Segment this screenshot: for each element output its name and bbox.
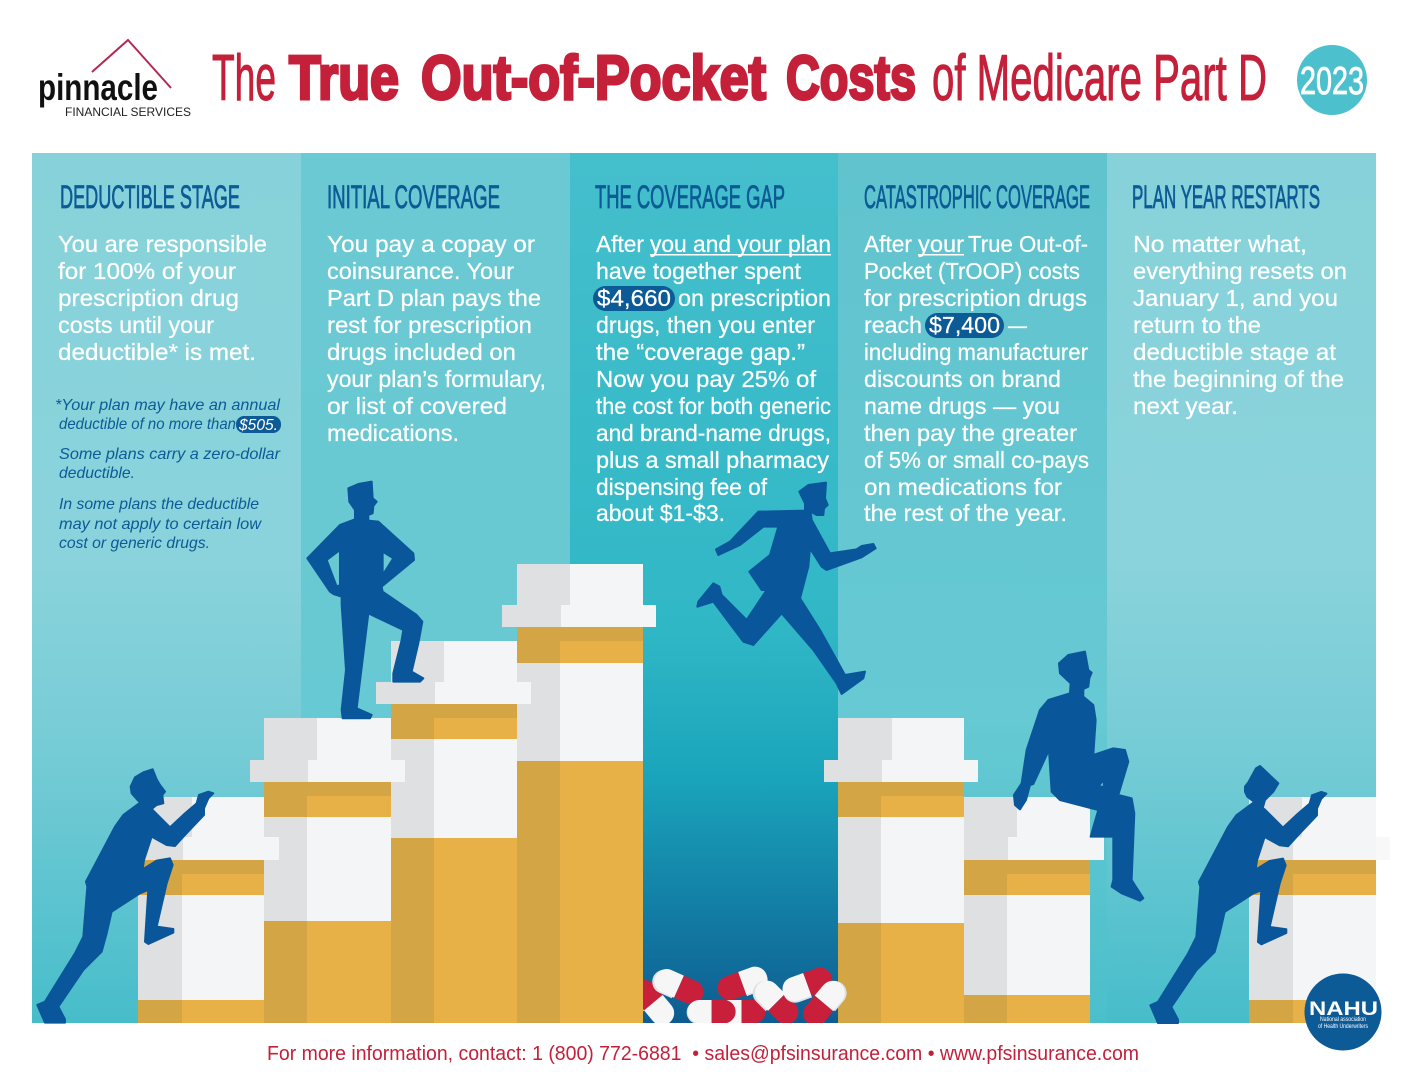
pill bottle 2 (250, 718, 405, 1023)
year badge (1297, 45, 1367, 115)
body text: catastrophic coverage: including manufacturer (864, 339, 1088, 365)
body text: catastrophic coverage: name drugs — you (864, 393, 1060, 419)
body text: coverage gap: Now you pay 25% of (596, 366, 817, 392)
panel: initial coverage (327, 179, 546, 446)
body text: catastrophic coverage: Pocket (TrOOP) costs (864, 258, 1080, 284)
body text: initial coverage (327, 231, 546, 446)
body text: coverage gap: drugs, then you enter (596, 312, 815, 338)
heading: the coverage gap: THE COVERAGE GAP (595, 179, 785, 215)
body text: catastrophic coverage: your (918, 231, 964, 257)
logo badge: NAHU: of Health Underwriters (1318, 1024, 1368, 1030)
body text: deductible stage: for 100% of your (58, 258, 236, 284)
logo: Pinnacle Financial Services (38, 40, 191, 119)
body text: catastrophic coverage: on medications for (864, 474, 1062, 500)
footnotes: may not apply to certain low (59, 516, 262, 533)
logo badge: NAHU: National association (1320, 1017, 1366, 1023)
body text: catastrophic coverage: reach (864, 312, 922, 338)
body text: coverage gap: dispensing fee of (596, 474, 768, 500)
body text: deductible stage: You are responsible (58, 231, 267, 257)
pill bottle 4 (502, 564, 656, 1023)
pill bottle 7 (1235, 797, 1390, 1023)
body text: deductible stage: costs until your (58, 312, 214, 338)
body text: deductible stage (58, 231, 267, 365)
body text: coverage gap: you and your plan (650, 231, 831, 257)
panel: deductible stage (55, 179, 281, 552)
body text: coverage gap: on prescription (678, 285, 831, 311)
body text: initial coverage: You pay a copay or (327, 231, 535, 257)
body text: initial coverage: medications. (327, 420, 459, 446)
body text: coverage gap: about $1-$3. (596, 500, 725, 526)
footnotes: cost or generic drugs. (59, 535, 210, 552)
body text: initial coverage: rest for prescription (327, 312, 532, 338)
body text: plan year restarts: return to the (1133, 312, 1261, 338)
body text: plan year restarts: everything resets on (1133, 258, 1347, 284)
body text: coverage gap: After (596, 231, 644, 257)
body text: catastrophic coverage: After (864, 231, 912, 257)
silhouette: standing man on bottle (307, 482, 423, 718)
footnotes: In some plans the deductible (59, 496, 259, 513)
body text: catastrophic coverage: discounts on brand (864, 366, 1061, 392)
body text: coverage gap: the “coverage gap.” (596, 339, 805, 365)
body text: plan year restarts (1133, 231, 1347, 419)
body text: plan year restarts: No matter what, (1133, 231, 1307, 257)
logo badge: NAHU: NAHU (1309, 999, 1378, 1020)
footnotes: *Your plan may have an annual (55, 397, 280, 414)
footnotes: Some plans carry a zero-dollar (59, 446, 281, 463)
body text: initial coverage: your plan’s formulary, (327, 366, 546, 392)
pill bottle 5 (824, 718, 978, 1023)
panel: plan year restarts (1132, 179, 1347, 419)
body text: plan year restarts: January 1, and you (1133, 285, 1338, 311)
title: Costs (786, 44, 916, 113)
body text: coverage gap: the cost for both generic (596, 393, 831, 419)
highlight: $4,660: $4,660 (597, 285, 671, 311)
logo subtitle: FINANCIAL SERVICES (65, 105, 191, 119)
body text: catastrophic coverage: — (1008, 312, 1027, 338)
title: The (212, 41, 276, 114)
body text: coverage gap: and brand-name drugs, (596, 420, 831, 446)
silhouette: climbing man, right (1150, 766, 1326, 1023)
spilled capsules (643, 966, 847, 1023)
body text: catastrophic coverage: then pay the greater (864, 420, 1077, 446)
heading: initial coverage: INITIAL COVERAGE (327, 179, 500, 215)
body text: catastrophic coverage: the rest of the year. (864, 500, 1067, 526)
footnotes (55, 397, 281, 552)
highlight: $7,400: $7,400 (929, 312, 1000, 338)
body text: catastrophic coverage: for prescription drugs (864, 285, 1087, 311)
logo wordmark: pinnacle (38, 67, 158, 108)
logo roof (92, 40, 171, 88)
silhouette: sitting man (1014, 652, 1143, 901)
panel: coverage gap (593, 179, 831, 526)
footer contact line: For more information, contact: 1 (800) 772-6881 • sales@pfsinsurance.com • www.pfsinsurance.com (267, 1043, 1139, 1065)
body text: catastrophic coverage: True Out-of- (968, 231, 1088, 257)
footnotes: deductible of no more than (59, 416, 236, 433)
body text: initial coverage: drugs included on (327, 339, 516, 365)
pill bottle 1 (124, 797, 279, 1023)
title: True (289, 44, 399, 113)
footnotes: deductible. (59, 465, 135, 482)
silhouette: running man (697, 483, 876, 694)
body text: plan year restarts: next year. (1133, 393, 1238, 419)
silhouette: climbing man, left (37, 769, 213, 1023)
body text: plan year restarts: the beginning of the (1133, 366, 1344, 392)
panel: catastrophic coverage (864, 179, 1090, 526)
pill bottle 6 (964, 797, 1104, 1023)
title (212, 41, 1267, 114)
body text: plan year restarts: deductible stage at (1133, 339, 1337, 365)
body text: coverage gap: have together spent (596, 258, 802, 284)
heading: deductible stage: DEDUCTIBLE STAGE (60, 179, 240, 215)
title: Out-of-Pocket (421, 44, 766, 113)
body text: initial coverage: or list of covered (327, 393, 507, 419)
body text: initial coverage: coinsurance. Your (327, 258, 514, 284)
body text: initial coverage: Part D plan pays the (327, 285, 541, 311)
body text: deductible stage: prescription drug (58, 285, 239, 311)
year badge: 2023 (1300, 60, 1364, 103)
heading: catastrophic coverage: CATASTROPHIC COVERAGE (864, 179, 1090, 215)
body text: deductible stage: deductible* is met. (58, 339, 256, 365)
background columns (32, 153, 1376, 1023)
logo badge: NAHU (1304, 974, 1382, 1050)
body text: catastrophic coverage (864, 231, 1089, 526)
pill bottle 3 (376, 641, 531, 1023)
body text: coverage gap (593, 231, 831, 526)
body text: catastrophic coverage: of 5% or small co-pays (864, 447, 1089, 473)
body text: coverage gap: plus a small pharmacy (596, 447, 830, 473)
highlight: $505: $505. (238, 417, 278, 434)
